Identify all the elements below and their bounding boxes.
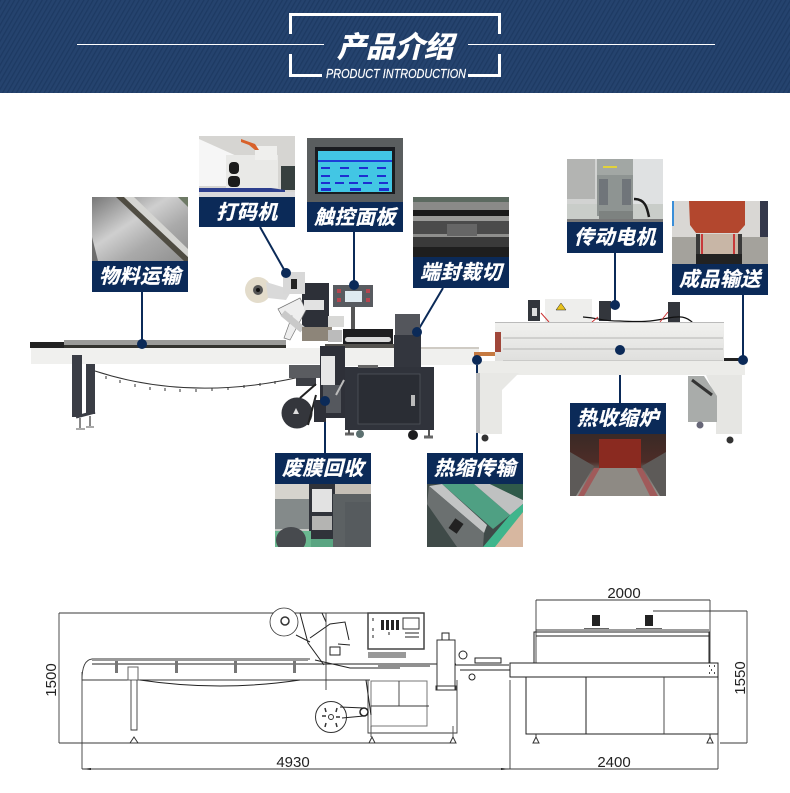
infeed conveyor — [30, 340, 321, 429]
sealing conveyor — [325, 329, 395, 366]
dimension: length 2400 — [510, 680, 718, 771]
dimension: width 2000: 2000 — [607, 585, 641, 602]
dot: product output — [738, 355, 748, 365]
dimension: length 2400: 2400 — [597, 754, 631, 771]
callout: 触控面板: 触控面板 — [314, 206, 398, 229]
dot: end seal — [412, 327, 422, 337]
callout: 成品输送 — [672, 201, 768, 295]
dimension: height 1550 — [653, 611, 749, 743]
tunnel table and legs — [476, 358, 745, 444]
outline: body and waste film roll — [316, 652, 457, 743]
callout: 废膜回收 — [275, 453, 371, 553]
motors and wiring — [528, 300, 693, 323]
header title bracket — [77, 13, 715, 81]
dot: printer — [281, 268, 291, 278]
cabinet and end sealer — [345, 314, 434, 440]
header title bracket: PRODUCT INTRODUCTION — [326, 66, 467, 81]
callout: 热收缩炉: 热收缩炉 — [577, 407, 661, 430]
callout: 传动电机 — [567, 159, 663, 253]
drawing: shrink tunnel side elevation — [510, 585, 749, 771]
dimension: height 1500 — [43, 613, 456, 743]
tunnel hood outline — [534, 630, 709, 663]
dot: drive motor — [610, 300, 620, 310]
tunnel hood — [495, 322, 724, 362]
dimension: height 1500: 1500 — [43, 663, 60, 697]
callout: 端封裁切: 端封裁切 — [420, 262, 504, 284]
header banner — [0, 0, 790, 93]
dot: film recovery — [320, 396, 330, 406]
callout: 废膜回收: 废膜回收 — [282, 457, 366, 480]
header title bracket: 产品介绍 — [337, 31, 458, 64]
outline: end sealer — [436, 633, 510, 690]
tunnel motors — [584, 615, 662, 628]
machine: flow wrapper — [30, 272, 500, 440]
electrical box — [545, 299, 592, 322]
callout: 热缩传输 — [427, 453, 523, 547]
dot: shrink conveying — [472, 355, 482, 365]
callout: 触控面板 — [307, 138, 403, 232]
callout: 物料运输: 物料运输 — [99, 265, 183, 288]
tunnel base outline — [510, 663, 718, 743]
dot: shrink furnace — [615, 345, 625, 355]
film roll and coder — [245, 272, 332, 341]
callout: 成品输送: 成品输送 — [679, 268, 762, 291]
control panel — [328, 285, 373, 342]
dimension: length 4930 — [82, 672, 510, 771]
dot: panel — [349, 280, 359, 290]
callout: 热收缩炉 — [570, 403, 666, 496]
outfeed belt — [421, 347, 500, 365]
machine: shrink tunnel — [476, 299, 745, 444]
dimension: length 4930: 4930 — [276, 754, 310, 771]
outline: infeed table — [82, 658, 370, 743]
callout: 端封裁切 — [413, 197, 509, 288]
callout: 物料运输 — [92, 197, 188, 292]
centre unit — [282, 346, 345, 428]
callout: 热缩传输: 热缩传输 — [434, 457, 518, 480]
callout: 打码机 — [199, 136, 295, 227]
leader lines — [142, 227, 743, 453]
callout: 传动电机: 传动电机 — [574, 227, 656, 249]
outline: control box — [368, 613, 424, 649]
dimension: width 2000 — [536, 585, 710, 663]
dimension: height 1550: 1550 — [732, 661, 749, 695]
callout: 打码机: 打码机 — [216, 202, 278, 224]
drawing: flow wrapper side elevation — [43, 608, 510, 771]
dot: infeed — [137, 339, 147, 349]
outline: film unit — [270, 608, 400, 690]
